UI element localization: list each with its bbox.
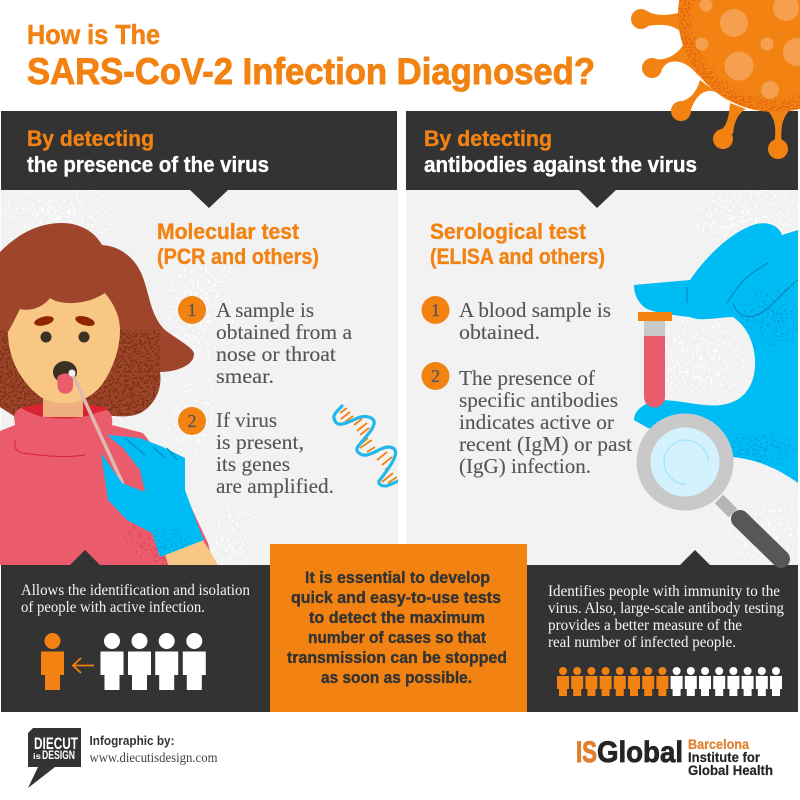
callout: orange key message: as soon as possible. (321, 668, 472, 687)
virus light spots (696, 0, 800, 99)
step text: specific antibodies (459, 388, 618, 412)
heading: serological test (430, 219, 605, 269)
illustration: woman taking swab (0, 223, 218, 565)
logo: Diecut is Design: is (33, 752, 42, 761)
step text: The presence of (459, 366, 596, 390)
panel: left gray background (1, 190, 398, 565)
ring (636, 414, 734, 510)
collar inner (20, 403, 106, 418)
hair (0, 223, 194, 420)
step 1 left: 1 (188, 300, 196, 320)
neck (43, 398, 83, 417)
orange person (41, 633, 64, 690)
panel: right header band (406, 111, 798, 190)
illustration: DNA helix (334, 406, 398, 486)
white people (671, 667, 782, 696)
logo: ISGlobal: Global Health (688, 762, 773, 778)
step 1 left (178, 296, 352, 388)
step text (459, 366, 632, 478)
right header pointer (579, 190, 616, 208)
step text: obtained from a (216, 320, 352, 344)
step 1 right (422, 296, 611, 344)
heading: right header: antibodies against the virus (424, 152, 697, 177)
heading: serological test: Serological test (430, 219, 587, 244)
pictogram: isolating one person (41, 633, 206, 690)
step 2 left: 2 (188, 411, 196, 431)
text: right conclusion (548, 583, 784, 651)
heading: molecular test (157, 219, 319, 269)
icon: coronavirus (631, 0, 800, 159)
arrow (73, 658, 94, 673)
sweater fold (15, 440, 85, 456)
virus body (678, 0, 800, 112)
callout: orange key message (270, 544, 527, 712)
bottom left pointer (70, 550, 100, 565)
step 2 right (422, 362, 632, 478)
lens (650, 428, 720, 496)
panel: left header band (1, 111, 397, 190)
heading: molecular test: Molecular test (157, 219, 300, 244)
white speckle texture right (665, 190, 798, 564)
glove speckle (154, 526, 192, 556)
sweater speckle (124, 516, 208, 565)
step text: its genes (216, 452, 290, 476)
text: right conclusion: Identifies people with immunity to the (548, 583, 780, 600)
heading: left header: the presence of the virus (27, 152, 269, 177)
logo: ISGlobal: Global (597, 736, 683, 769)
heading: right header: By detecting (424, 126, 552, 151)
panel: right gray background (406, 190, 798, 565)
tongue (57, 374, 73, 394)
callout: orange key message: It is essential to develop (305, 568, 490, 587)
title: SARS-CoV-2 Infection Diagnosed? (27, 50, 595, 92)
glove (101, 435, 204, 557)
bottom right pointer (680, 550, 710, 565)
heading: right header (424, 126, 697, 177)
lens glare (664, 440, 708, 484)
sweater (0, 425, 213, 565)
turtleneck collar (14, 408, 112, 425)
step text: (IgG) infection. (459, 454, 591, 478)
heading: left header: By detecting (27, 126, 154, 151)
step text: are amplified. (216, 474, 334, 498)
heading: molecular test: (PCR and others) (157, 244, 319, 269)
number badge (422, 362, 450, 390)
glove finger lines (125, 438, 177, 460)
eyebrows (34, 316, 54, 326)
text: left conclusion: of people with active infection. (21, 599, 205, 616)
swab tip (68, 370, 76, 376)
step text: If virus (216, 408, 277, 432)
step text (216, 408, 334, 498)
white people (100, 633, 206, 690)
white speckle texture left (2, 190, 262, 565)
pictogram: population row (557, 667, 782, 696)
step text: recent (IgM) or past (459, 432, 632, 456)
logo: ISGlobal: Barcelona (688, 736, 749, 752)
DNA rungs (340, 408, 397, 483)
step text (459, 298, 611, 344)
panel: bottom left band (1, 565, 270, 712)
mouth (53, 361, 77, 380)
wrist (165, 540, 218, 565)
panel: bottom right band (527, 565, 798, 712)
step 2 left (178, 407, 334, 498)
step text (216, 298, 352, 388)
logo: ISGlobal: IS (576, 736, 597, 769)
hair speckle (0, 330, 160, 420)
handle (740, 519, 781, 559)
virus rim speckle (678, 0, 800, 112)
test tube cap (638, 312, 672, 321)
credit text (90, 733, 218, 765)
title: How is The (27, 19, 160, 50)
glove lines (687, 263, 798, 316)
illustration: gloved hand with test tube (634, 223, 800, 483)
number badge (422, 296, 450, 324)
logo: Diecut is Design (28, 728, 81, 788)
step 1 right: 1 (431, 300, 440, 320)
test tube blood (644, 336, 665, 408)
title (27, 19, 595, 92)
logo: ISGlobal: Institute for (688, 749, 761, 765)
callout: orange key message: number of cases so that (308, 628, 486, 647)
blue glove (634, 223, 798, 483)
step text: obtained. (459, 320, 540, 344)
text: right conclusion: real number of infected people. (548, 634, 736, 651)
step text: nose or throat (216, 342, 336, 366)
text: right conclusion: provides a better measure of the (548, 617, 742, 634)
credit text: Infographic by: (90, 733, 174, 748)
face (8, 293, 120, 403)
text: left conclusion: Allows the identification and isolation (21, 582, 250, 599)
step text: indicates active or (459, 410, 614, 434)
handle neck (719, 499, 733, 513)
text: left conclusion (21, 582, 250, 616)
eyes (40, 332, 52, 342)
callout: orange key message: transmission can be stopped (287, 648, 507, 667)
callout: orange key message: quick and easy-to-use tests (291, 588, 501, 607)
logo: Diecut is Design: DIECUT (34, 734, 78, 753)
glove speckle (730, 284, 798, 468)
orange people (557, 667, 668, 696)
left header pointer (190, 190, 228, 208)
credit text: www.diecutisdesign.com (90, 750, 218, 765)
DNA strand (334, 406, 398, 486)
test tube body (644, 321, 665, 337)
number badge (178, 296, 206, 324)
swab (72, 373, 123, 484)
number badge (178, 407, 206, 435)
callout: orange key message: to detect the maximum (309, 608, 485, 627)
logo: ISGlobal (576, 736, 773, 778)
step text: is present, (216, 430, 304, 454)
icon: magnifying glass (636, 414, 781, 559)
heading: serological test: (ELISA and others) (430, 244, 605, 269)
step text: A sample is (216, 298, 314, 322)
step text: smear. (216, 364, 274, 388)
virus spikes (631, 9, 789, 159)
step text: A blood sample is (459, 298, 611, 322)
step 2 right: 2 (431, 366, 440, 386)
heading: left header (27, 126, 269, 177)
text: right conclusion: virus. Also, large-scale antibody testing (548, 600, 784, 617)
logo: Diecut is Design: DESIGN (42, 748, 75, 762)
